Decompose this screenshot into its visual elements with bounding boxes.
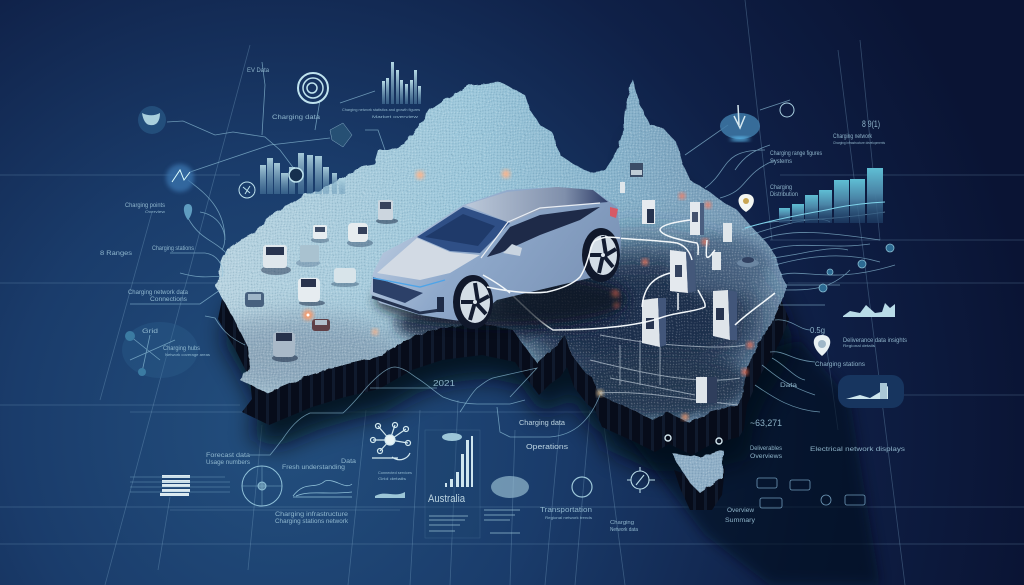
text labels: Overviews (750, 453, 783, 460)
side windows (487, 207, 600, 257)
bottom ring (572, 477, 592, 497)
rounded chart panel (838, 375, 904, 408)
text labels: Distribution (770, 191, 798, 198)
bottom right vehicle icons (757, 478, 865, 508)
text labels: Network coverage areas (165, 352, 210, 357)
text labels: 8 Ranges (100, 250, 133, 257)
small truck (630, 163, 643, 177)
text labels: Charging network (833, 133, 873, 140)
text labels: Grid (142, 328, 158, 335)
text labels: Grid details (378, 476, 406, 481)
map extrusion (218, 112, 789, 455)
text labels: Charging data (272, 114, 320, 121)
bottom connector lines (250, 367, 600, 455)
location pin lower right (814, 335, 830, 356)
charger E (642, 200, 655, 224)
circle icon top right (780, 103, 794, 117)
text labels: Overview (727, 507, 754, 514)
star network icon (370, 422, 410, 460)
text labels: Charging infrastructure developments (833, 140, 885, 145)
charger H (696, 377, 717, 403)
Tasmania (672, 450, 723, 493)
windshield (417, 207, 510, 253)
text labels: Charging network statistics and growth figures (342, 107, 420, 112)
distant car (737, 257, 759, 267)
left network graphic (122, 322, 198, 378)
text labels: Regional details (843, 343, 875, 348)
trend line on right chart (745, 202, 885, 228)
text labels: 8 9(1) (862, 119, 880, 129)
map of Australia (215, 80, 787, 423)
tail light (610, 207, 618, 218)
charger A (670, 250, 696, 293)
bottom radar circle (242, 466, 282, 506)
text labels: Summary (725, 517, 756, 524)
hood (377, 238, 480, 280)
text labels: Electrical network displays (810, 446, 906, 453)
text labels: Systems (770, 158, 793, 165)
charging stations (620, 163, 759, 403)
left connector lines (130, 62, 385, 345)
text labels: Market overview (372, 114, 418, 119)
text labels: Charging infrastructure (275, 511, 348, 518)
right bar chart (779, 168, 883, 223)
text labels: Network data (610, 527, 638, 533)
location pin left (184, 204, 192, 220)
text labels: Australia (428, 493, 466, 505)
text labels: Overview (145, 209, 165, 214)
text labels: Charging stations (152, 245, 195, 252)
text labels: EV Data (247, 67, 269, 74)
node on mid chart (289, 168, 303, 182)
blue glow node (166, 164, 194, 192)
text labels: Deliverance data insights (843, 337, 908, 344)
front fascia (373, 277, 423, 303)
small charger (620, 182, 625, 193)
mirror (503, 244, 522, 256)
text labels: Operations (526, 444, 569, 451)
text labels: Forecast data (206, 452, 250, 459)
charger F (723, 223, 732, 242)
bottom line chart (293, 481, 352, 497)
text labels: Usage numbers (206, 459, 251, 466)
text labels: Charging hubs (163, 345, 201, 352)
diamond icon (330, 123, 352, 147)
right connector lines (685, 100, 895, 412)
text labels: Charging (610, 520, 634, 526)
charger B (642, 298, 666, 347)
trim line (481, 203, 600, 258)
Tasmania pins (665, 435, 722, 444)
text labels: Charging stations network (275, 518, 349, 525)
text labels: Regional network trends (545, 515, 592, 520)
concentric target icon (298, 73, 328, 103)
text labels: 2021 (433, 379, 456, 388)
mid bar chart (260, 153, 345, 194)
compass icon (627, 467, 655, 493)
text labels: Transportation (540, 507, 592, 514)
text labels: Connected services (378, 470, 412, 475)
road lines (590, 335, 745, 405)
Tasmania extrusion (674, 468, 725, 510)
charge cable at car (483, 237, 620, 293)
text labels: Fresh understanding (282, 464, 345, 471)
text labels: Data (341, 458, 356, 465)
location pin upper right (738, 194, 754, 212)
text labels: Charging range figures (770, 150, 823, 157)
text labels: 0.5g (810, 326, 825, 335)
area chart right (843, 303, 895, 317)
electric car (370, 187, 625, 329)
top bar chart (382, 62, 421, 104)
glow markers (303, 170, 753, 420)
text labels: ~63,271 (750, 418, 782, 428)
text labels: Charging stations (815, 361, 866, 368)
bottom list bars (160, 475, 190, 496)
roof (465, 187, 608, 223)
text labels: Deliverables (750, 445, 783, 452)
text labels: Data (780, 382, 797, 389)
front wheel (453, 275, 493, 329)
small gauge icon (239, 182, 255, 198)
text labels: Charging (770, 184, 792, 191)
bottom panel lines (429, 510, 520, 533)
text labels: Charging points (125, 202, 166, 209)
cables to chargers (510, 220, 775, 330)
small wave glyph (375, 492, 405, 498)
dome icon (720, 105, 760, 141)
charger C (713, 290, 737, 340)
cloud graphic (491, 476, 529, 498)
map shadow (224, 135, 880, 585)
charger G (712, 252, 721, 270)
vehicles on western map (245, 200, 398, 362)
framed bar chart (425, 430, 480, 538)
list bar lines (130, 477, 230, 492)
text labels: Charging network data (128, 289, 188, 296)
text labels: Connections (150, 296, 188, 303)
text labels: Charging data (519, 420, 565, 427)
left blob node (138, 106, 166, 134)
charger D (690, 202, 704, 235)
rear wheel (582, 228, 620, 282)
node circles right (819, 244, 894, 292)
text labels (100, 67, 908, 533)
